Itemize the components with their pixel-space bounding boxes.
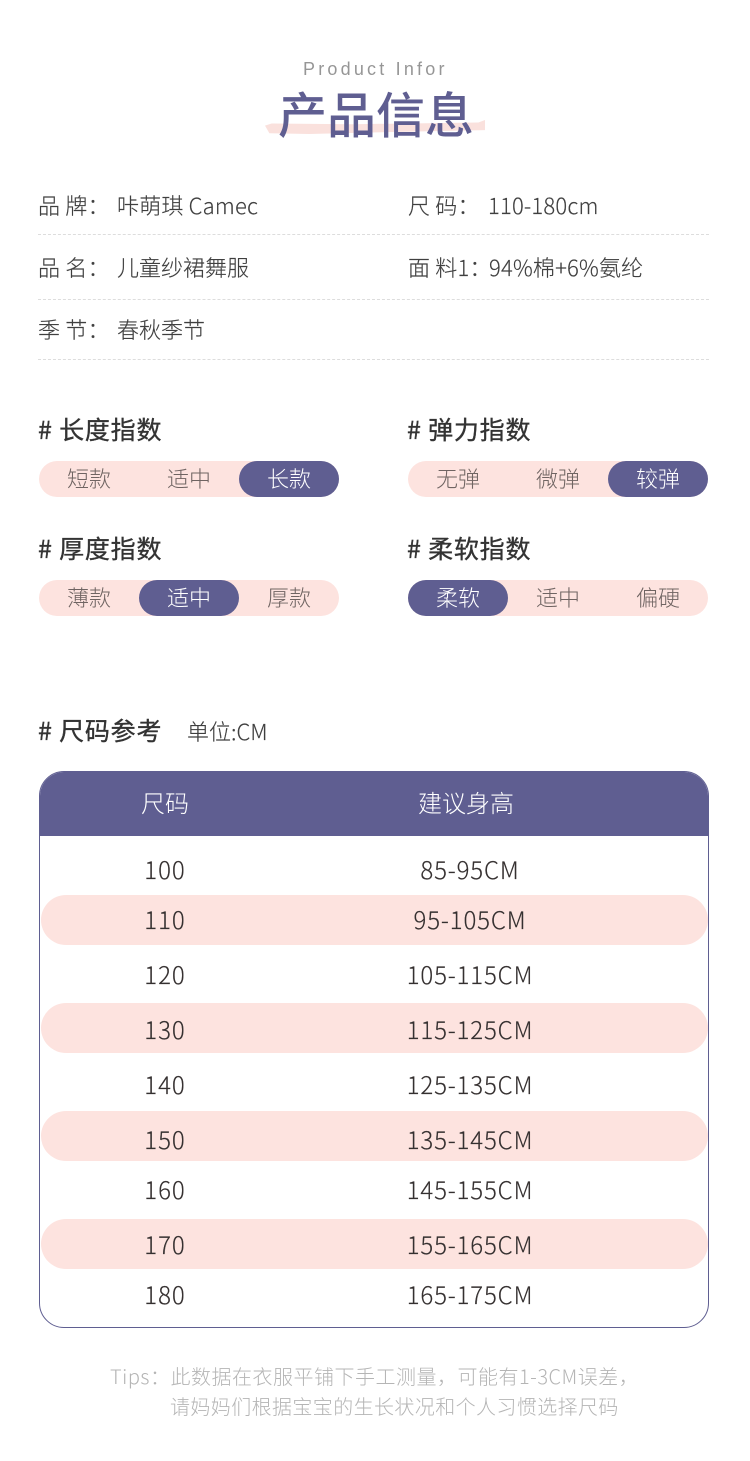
option: thin: 薄款 xyxy=(67,581,111,613)
band: row 130 xyxy=(41,1003,708,1053)
option: long, selected: 长款 xyxy=(267,462,311,494)
season value: 春秋季节 xyxy=(117,313,205,345)
size 140: 140 xyxy=(144,1066,186,1101)
heading: elasticity index: # 弹力指数 xyxy=(407,411,531,447)
fabric label: 面 料1： xyxy=(408,251,492,283)
heading: softness index: # 柔软指数 xyxy=(407,530,531,566)
season label: 季 节： xyxy=(38,313,110,345)
height 95-105CM: 95-105CM xyxy=(414,901,526,936)
option: medium: 适中 xyxy=(167,462,211,494)
tips line 2: 请妈妈们根据宝宝的生长状况和个人习惯选择尺码 xyxy=(170,1391,619,1420)
column header: recommended height: 建议身高 xyxy=(418,784,514,819)
tips line 1: Tips：此数据在衣服平铺下手工测量，可能有1-3CM误差， xyxy=(110,1361,639,1390)
size 160: 160 xyxy=(144,1171,186,1206)
scale: length index xyxy=(39,461,339,497)
size label: 尺 码： xyxy=(408,189,480,221)
height 85-95CM: 85-95CM xyxy=(420,851,520,886)
unit note: 单位:CM xyxy=(187,715,268,747)
option: slight stretch: 微弹 xyxy=(536,462,580,494)
height 125-135CM: 125-135CM xyxy=(407,1066,533,1101)
size 130: 130 xyxy=(144,1011,186,1046)
height 135-145CM: 135-145CM xyxy=(407,1121,533,1156)
height 105-115CM: 105-115CM xyxy=(407,956,533,991)
size value: 110-180cm xyxy=(488,189,599,221)
brand value: 咔萌琪 Camec xyxy=(117,189,258,221)
option: medium, selected: 适中 xyxy=(167,581,211,613)
scale: softness index xyxy=(408,580,708,616)
table header xyxy=(39,771,709,836)
brand label: 品 牌： xyxy=(38,189,110,221)
option: medium: 适中 xyxy=(536,581,580,613)
heading: thickness index: # 厚度指数 xyxy=(38,530,162,566)
option: thick: 厚款 xyxy=(267,581,311,613)
option: medium, selected xyxy=(139,580,239,616)
tips note xyxy=(110,1361,639,1420)
panel: product details xyxy=(38,189,709,360)
scale: thickness index xyxy=(39,580,339,616)
fabric value: 94%棉+6%氨纶 xyxy=(489,251,643,283)
option: soft, selected: 柔软 xyxy=(436,581,480,613)
option: short: 短款 xyxy=(67,462,111,494)
option: long, selected xyxy=(239,461,339,497)
height 165-175CM: 165-175CM xyxy=(407,1276,533,1311)
height 115-125CM: 115-125CM xyxy=(407,1011,533,1046)
decoration: pink brush stroke xyxy=(265,120,485,134)
name label: 品 名： xyxy=(38,251,110,283)
option: no stretch: 无弹 xyxy=(436,462,480,494)
size 110: 110 xyxy=(144,901,186,936)
option: more stretch, selected xyxy=(608,461,708,497)
name value: 儿童纱裙舞服 xyxy=(117,251,249,283)
size 100: 100 xyxy=(144,851,186,886)
size 150: 150 xyxy=(144,1121,186,1156)
height 145-155CM: 145-155CM xyxy=(407,1171,533,1206)
size 180: 180 xyxy=(144,1276,186,1311)
band: row 150 xyxy=(41,1111,708,1161)
table: size chart xyxy=(39,771,709,1328)
title: 产品信息 xyxy=(278,77,474,148)
band: row 170 xyxy=(41,1219,708,1269)
height 155-165CM: 155-165CM xyxy=(407,1226,533,1261)
heading: length index: # 长度指数 xyxy=(38,411,162,447)
option: soft, selected xyxy=(408,580,508,616)
heading: size reference: # 尺码参考 xyxy=(38,712,162,748)
heading: Product Infor subtitle: Product Infor xyxy=(303,59,448,79)
band: row 110 xyxy=(41,895,708,945)
scale: elasticity index xyxy=(408,461,708,497)
size 170: 170 xyxy=(144,1226,186,1261)
option: more stretch, selected: 较弹 xyxy=(636,462,680,494)
option: stiff: 偏硬 xyxy=(636,581,680,613)
size 120: 120 xyxy=(144,956,186,991)
column header: size: 尺码 xyxy=(141,784,189,819)
